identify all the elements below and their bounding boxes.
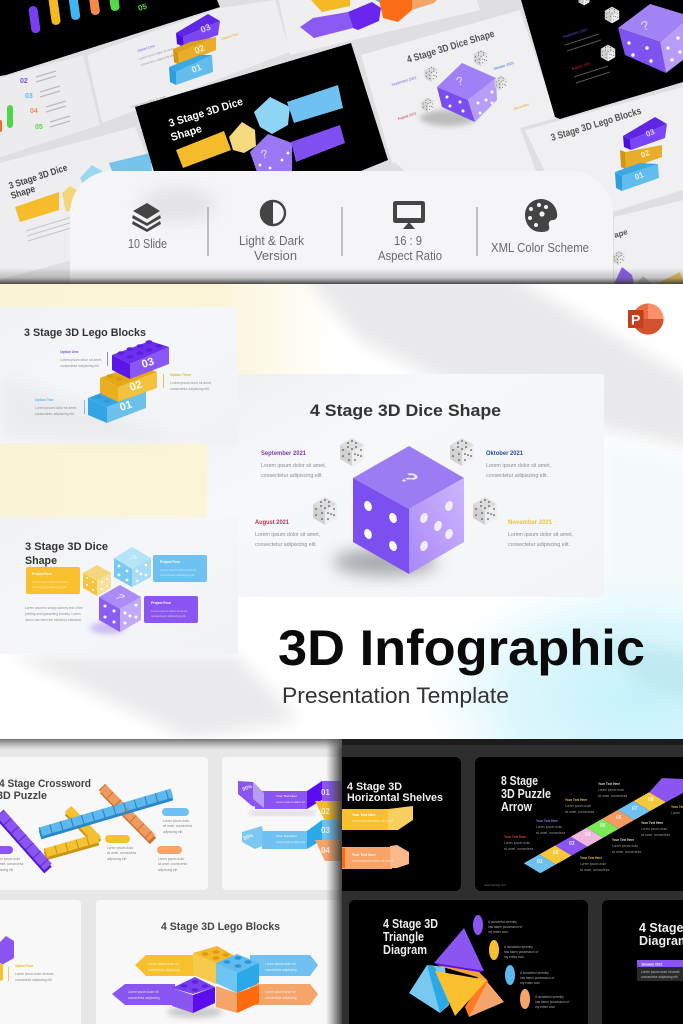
slide: partial lego: Lorem ipsum dolor sit amet, (15, 972, 54, 976)
pills and captions: adipiscing elit. (158, 868, 178, 872)
slide: list light left: 02 (20, 78, 28, 85)
arrow captions: Your Text Here (641, 821, 663, 825)
puzzle arrow: 04 (585, 832, 591, 838)
label: Light & Dark Version (239, 234, 305, 263)
puzzle arrow: 08 (648, 797, 654, 803)
feature panel (70, 171, 613, 284)
pills and captions: Lorem ipsum dolor (158, 857, 185, 861)
heading: 4 Stage 3D Dice Shape (310, 401, 501, 420)
icon: blue dice: ? (124, 554, 139, 563)
blue info box: consectetur adipiscing elit. (160, 573, 195, 577)
title: 3D Infographic: 3D Infographic (278, 620, 645, 676)
arrow captions: Your Text Here (580, 856, 602, 860)
arrow captions: Your Text Here (536, 819, 558, 823)
slide: chart dark top left (0, 0, 220, 76)
slide: dice dark centre: 3 Stage 3D Dice (167, 96, 245, 130)
slide: dice light lower left (0, 127, 155, 280)
heading: Arrow (501, 800, 532, 814)
background: top showcase strip (0, 0, 683, 284)
slide: chart dark top left: 05 (137, 2, 149, 13)
pills and captions: Lorem ipsum dolor (163, 819, 190, 823)
arrows and bricks: consectetur adipiscing (265, 996, 297, 1000)
main hero background (0, 284, 683, 739)
paragraph: printing and typesetting industry. Lorem (25, 612, 81, 616)
heading (25, 541, 108, 567)
slide: ribbons: Lorem ipsum dolor sit (276, 800, 305, 804)
arrow captions: Your Text Here (504, 835, 526, 839)
slide: lego light top: Option Two (221, 32, 239, 41)
slide: list light left: 05 (35, 124, 43, 131)
puzzle pieces and captions: has taken possession of (488, 925, 522, 929)
yellow info box: consectetur adipiscing elit. (32, 585, 67, 589)
slide: ribbons: 90% (242, 784, 254, 793)
icon: layers (132, 203, 161, 232)
purple info box: Project Four (151, 601, 172, 605)
pills and captions (0, 808, 193, 872)
arrow captions: www.website.com (484, 883, 507, 887)
slide: dice centre light: September 2021 (391, 76, 417, 87)
text block: November (508, 520, 573, 548)
slide: lego light right: 01 (633, 170, 646, 182)
arrow captions: Your Text Here (598, 782, 620, 786)
text blocks: Lorem ipsum dolor sit amet, (170, 381, 212, 385)
slide: ribbons: 02 (321, 807, 330, 816)
icon: big purple dice (333, 446, 464, 576)
heading: Triangle (383, 930, 424, 944)
puzzle pieces and captions: my entire soul (488, 930, 508, 934)
icon: purple dice (90, 585, 141, 634)
purple info box: Lorem ipsum dolor sit amet, (151, 609, 188, 613)
slide: partial lego (0, 900, 81, 1024)
text block: Oktober: Lorem ipsum dolor sit amet, (486, 463, 551, 469)
puzzle pieces and captions: A wonderful serenity (535, 995, 564, 999)
slide: lego light top: consectetur adipiscing elit. (140, 53, 175, 67)
slide: partial right lower (613, 200, 683, 284)
slide: dice centre light (361, 10, 556, 171)
text blocks: Lorem ipsum dolor sit amet, (35, 406, 77, 410)
arrow captions: sit amet, consectetur (641, 833, 671, 837)
text block: September (261, 451, 326, 479)
purple info box (144, 596, 198, 623)
arrow captions (484, 782, 683, 887)
heading (0, 778, 91, 802)
pills and captions: Lorem ipsum dolor (107, 846, 134, 850)
text blocks: consectetur adipiscing elit. (35, 412, 75, 416)
label: 10 Slide: 10 Slide (128, 237, 167, 251)
text block: Oktober (486, 451, 551, 479)
icon: big purple dice: ? (394, 470, 423, 487)
text blocks: Option One (60, 350, 79, 354)
arrows and bricks: consectetur adipiscing (148, 968, 180, 972)
puzzle arrow: 02 (553, 850, 559, 856)
text block: November: consectetur adipiscing elit. (508, 542, 570, 548)
icon: monitor (393, 201, 425, 229)
puzzle arrow (524, 778, 683, 873)
slide: 4 Stage 3D Diagram: consectetur adipiscing elit. (641, 975, 678, 979)
slide: ribbons: 01 (321, 788, 330, 797)
heading: 3 Stage 3D Lego Blocks (24, 327, 146, 339)
lego bricks (88, 340, 169, 423)
slide: 4 Stage 3D Horizontal Shelves (342, 757, 461, 891)
bottom left: light slides panel (0, 739, 352, 1024)
text block: Oktober: Oktober 2021 (486, 451, 524, 457)
text block: November: November 2021 (508, 520, 553, 526)
text block: September: September 2021 (261, 451, 307, 457)
pills and captions: sit amet, consectetur (158, 862, 188, 866)
pills and captions: sit amet, consectetur (163, 824, 193, 828)
text block: November: Lorem ipsum dolor sit amet, (508, 532, 573, 538)
text blocks: Option Two (35, 398, 53, 402)
lego bricks: 03 (140, 356, 156, 371)
label: 16:9 Aspect Ratio: Aspect Ratio (378, 249, 442, 263)
label: 16:9 Aspect Ratio (378, 234, 442, 263)
puzzle pieces and captions: my entire soul (535, 1005, 555, 1009)
puzzle arrow: 07 (632, 806, 638, 812)
blue info box: Lorem ipsum dolor sit amet, (160, 568, 197, 572)
slide: lego light top: 01 (190, 62, 203, 75)
text blocks: Option Three (170, 373, 191, 377)
slide: lego light top: Option One (137, 44, 155, 53)
puzzle arrow: 03 (569, 841, 575, 847)
paragraph: Lorem Ipsum is simply dummy text of the (25, 606, 83, 610)
yellow info box: Lorem ipsum dolor sit amet, (32, 580, 69, 584)
heading: Shape (25, 555, 57, 567)
arrow captions: sit amet, consectetur (504, 847, 534, 851)
slide: ribbons: Your Text Here (276, 794, 297, 798)
icon: purple dice: ? (111, 593, 128, 602)
slide: ribbons: 03 (321, 826, 330, 835)
slide: partial right lower: ape (613, 227, 629, 240)
arrow captions: Lorem ipsum dolor (580, 862, 607, 866)
slide: list light left: 03 (25, 93, 33, 100)
pills and captions: adipiscing elit. (107, 857, 127, 861)
label: 16:9 Aspect Ratio: 16 : 9 (394, 234, 422, 248)
paragraph (25, 606, 83, 622)
arrow captions: sit amet, consectetur (598, 794, 628, 798)
slide: 8 Stage 3D Puzzle Arrow (475, 757, 683, 891)
blue info box: Project Four (160, 560, 181, 564)
arrows and bricks: Lorem ipsum dolor sit (265, 990, 296, 994)
slide: lego light top (87, 0, 290, 123)
slide: lego light top: 02 (193, 43, 206, 56)
shelves: Lorem ipsum dolor sit amet (352, 819, 393, 823)
label: XML Color Scheme: XML Color Scheme (491, 241, 589, 255)
icon: small grey dice (313, 438, 497, 525)
slide: lego light top: Lorem ipsum dolor sit amet, (138, 46, 175, 61)
icon: PowerPoint logo: P (631, 312, 640, 328)
puzzle pieces and captions: has taken possession of (535, 1000, 569, 1004)
slide: dice dark centre: ? (259, 147, 270, 162)
arrow captions: Lorem ipsum dolor (504, 841, 531, 845)
arrow captions: sit amet, consectetur (565, 810, 595, 814)
arrow captions: sit amet, consectetur (580, 868, 610, 872)
heading (347, 781, 443, 804)
subtitle: Presentation Template: Presentation Template (282, 683, 509, 708)
arrow captions: Lorem (671, 811, 680, 815)
blue info box (153, 555, 207, 582)
slide: 4 Stage 3D Diagram: January 2021 (641, 962, 663, 966)
text block: September: consectetur adipiscing elit. (261, 473, 323, 479)
arrow captions: sit amet, consectetur (612, 850, 642, 854)
slide: dice top right dark: ? (639, 17, 651, 34)
purple info box: consectetur adipiscing elit. (151, 614, 186, 618)
slide: 4 Stage 3D Diagram: Lorem ipsum dolor sit amet, (641, 970, 680, 974)
shelves: Your Text Here (352, 853, 376, 857)
puzzle pieces and captions (473, 915, 569, 1009)
slide: lego light right: 02 (639, 148, 652, 160)
slide: ribbons: 90% (243, 833, 255, 842)
bottom right: dark slides panel (342, 739, 683, 1024)
slide: partial lego: Option Four (15, 964, 34, 968)
heading: 8 Stage (501, 774, 538, 788)
text block: September: Lorem ipsum dolor sit amet, (261, 463, 326, 469)
puzzle arrow: 05 (600, 823, 606, 829)
yellow info box: Project Four (32, 572, 53, 576)
label: Light & Dark Version: Light & Dark (239, 234, 305, 248)
arrows and bricks: consectetur adipiscing (128, 996, 160, 1000)
slide: dice centre light: ? (454, 73, 466, 89)
arrows and bricks: Lorem ipsum dolor sit (265, 962, 296, 966)
slide: dice dark centre: Shape (169, 123, 203, 144)
arrows and bricks: Lorem ipsum dolor sit (128, 990, 159, 994)
slide: 4 Stage 3D Diagram (602, 900, 683, 1024)
slide: list light left: 04 (30, 108, 38, 115)
text block: August: consectetur adipiscing elit. (255, 542, 317, 548)
arrows and bricks: Lorem ipsum dolor sit (148, 962, 179, 966)
heading: 4 Stage 3D Lego Blocks (161, 921, 280, 933)
slide: lego light top: Lorem ipsum dolor sit amet, (130, 94, 167, 109)
puzzle pieces and captions: A wonderful serenity (504, 945, 533, 949)
text blocks: consectetur adipiscing elit. (170, 387, 210, 391)
heading: 3D Puzzle (501, 787, 551, 801)
heading (383, 917, 438, 957)
crossword strips (0, 787, 172, 870)
slide: 4 Stage Crossword (0, 757, 208, 890)
puzzle pieces and captions: A wonderful serenity (520, 971, 549, 975)
arrows and bricks: consectetur adipiscing (265, 968, 297, 972)
heading: Diagram (383, 943, 427, 957)
arrow captions: Lorem ipsum dolor (565, 804, 592, 808)
shelves: Lorem ipsum dolor sit amet (352, 859, 393, 863)
slide: dice light lower left: Shape (10, 184, 37, 202)
3D triangle (409, 928, 504, 1017)
slide: 4 Stage 3D Dice Shape (207, 374, 604, 597)
arrow captions: sit amet, consectetur (536, 831, 566, 835)
heading: 3 Stage 3D Dice (25, 541, 108, 553)
slide: dice centre light: August 2021 (397, 111, 417, 121)
lego bricks: 02 (128, 379, 144, 394)
slide: ribbons: Your Text Here (276, 834, 297, 838)
slide: dice light lower left: 3 Stage 3D Dice (8, 163, 69, 192)
icon: PowerPoint logo (628, 304, 664, 334)
puzzle pieces and captions: has taken possession of (504, 950, 538, 954)
icon: palette (525, 199, 557, 232)
slide: dice dark centre (135, 43, 388, 175)
arrow captions: Lorem ipsum dolor (641, 827, 668, 831)
slide: 4 Stage 3D Triangle Diagram (349, 900, 588, 1024)
shelves: Your Text Here (352, 813, 376, 817)
puzzle arrow: 01 (537, 859, 543, 865)
slide: partial lego: consectetur adipiscing elit. (15, 978, 52, 982)
label: Light & Dark Version: Version (254, 249, 297, 263)
shelves (342, 806, 413, 869)
arrow captions: Lorem ipsum dolor (598, 788, 625, 792)
text blocks: consectetur adipiscing elit. (60, 364, 100, 368)
slide: 4 Stage 3D Lego Blocks (96, 900, 352, 1024)
arrow captions: Your Text Here (565, 798, 587, 802)
text block: August: August 2021 (255, 520, 290, 526)
puzzle pieces and captions: A wonderful serenity (488, 920, 517, 924)
puzzle pieces and captions: my entire soul (504, 955, 524, 959)
yellow info box (26, 567, 80, 594)
slide: ribbons: Lorem ipsum dolor sit (276, 840, 305, 844)
puzzle pieces and captions: has taken possession of (520, 976, 554, 980)
slide: lego light right: 3 Stage 3D Lego Blocks (550, 106, 643, 144)
text block: Oktober: consectetur adipiscing elit. (486, 473, 548, 479)
icon: yellow dice (83, 565, 111, 596)
slide: dice top right dark: August 2021 (571, 61, 591, 71)
slide: lego light top: 03 (199, 22, 212, 35)
pills and captions: sit amet, consectetur (107, 851, 137, 855)
slide: ribbons (222, 757, 352, 890)
slide: 3 Stage 3D Dice Shape (0, 517, 238, 654)
heading: Horizontal Shelves (347, 792, 443, 804)
slide: dice centre light: 4 Stage 3D Dice Shape (406, 29, 496, 66)
puzzle arrow: 06 (616, 815, 622, 821)
heading: 4 Stage 3D (347, 781, 402, 793)
text blocks (35, 350, 212, 416)
slide: dice centre light: November (513, 102, 531, 111)
slide: 3 Stage 3D Lego Blocks (0, 307, 238, 444)
heading: 4 Stage 3D (383, 917, 438, 931)
slide: dice top right dark: September 2021 (562, 28, 588, 39)
arrow captions: Lorem ipsum dolor (612, 844, 639, 848)
slide: dice top right dark (521, 0, 683, 119)
text block: August (255, 520, 320, 548)
pills and captions: adipiscing elit. (163, 830, 183, 834)
slide: dice centre light: Oktober 2021 (493, 61, 515, 71)
text block: August: Lorem ipsum dolor sit amet, (255, 532, 320, 538)
icon: blue dice (114, 547, 151, 587)
slide: lego light right (525, 87, 683, 225)
lego bricks: 01 (118, 399, 134, 414)
paragraph: Ipsum has been the industry's standard. (25, 618, 82, 622)
icon: half circle light and dark (260, 200, 285, 226)
slide: lego light right: 03 (644, 127, 657, 139)
slide: list light left (0, 55, 100, 157)
puzzle pieces and captions: my entire soul (520, 981, 540, 985)
slide: orange lego top centre (279, 0, 480, 55)
arrow captions: Your Text Here (612, 838, 634, 842)
heading: 4 Stage Crossword (0, 778, 91, 790)
slide: ribbons: 04 (321, 846, 330, 855)
arrow captions: Lorem ipsum dolor (536, 825, 563, 829)
text blocks: Lorem ipsum dolor sit amet, (60, 358, 102, 362)
heading (501, 774, 551, 814)
arrows and bricks (112, 946, 318, 1018)
